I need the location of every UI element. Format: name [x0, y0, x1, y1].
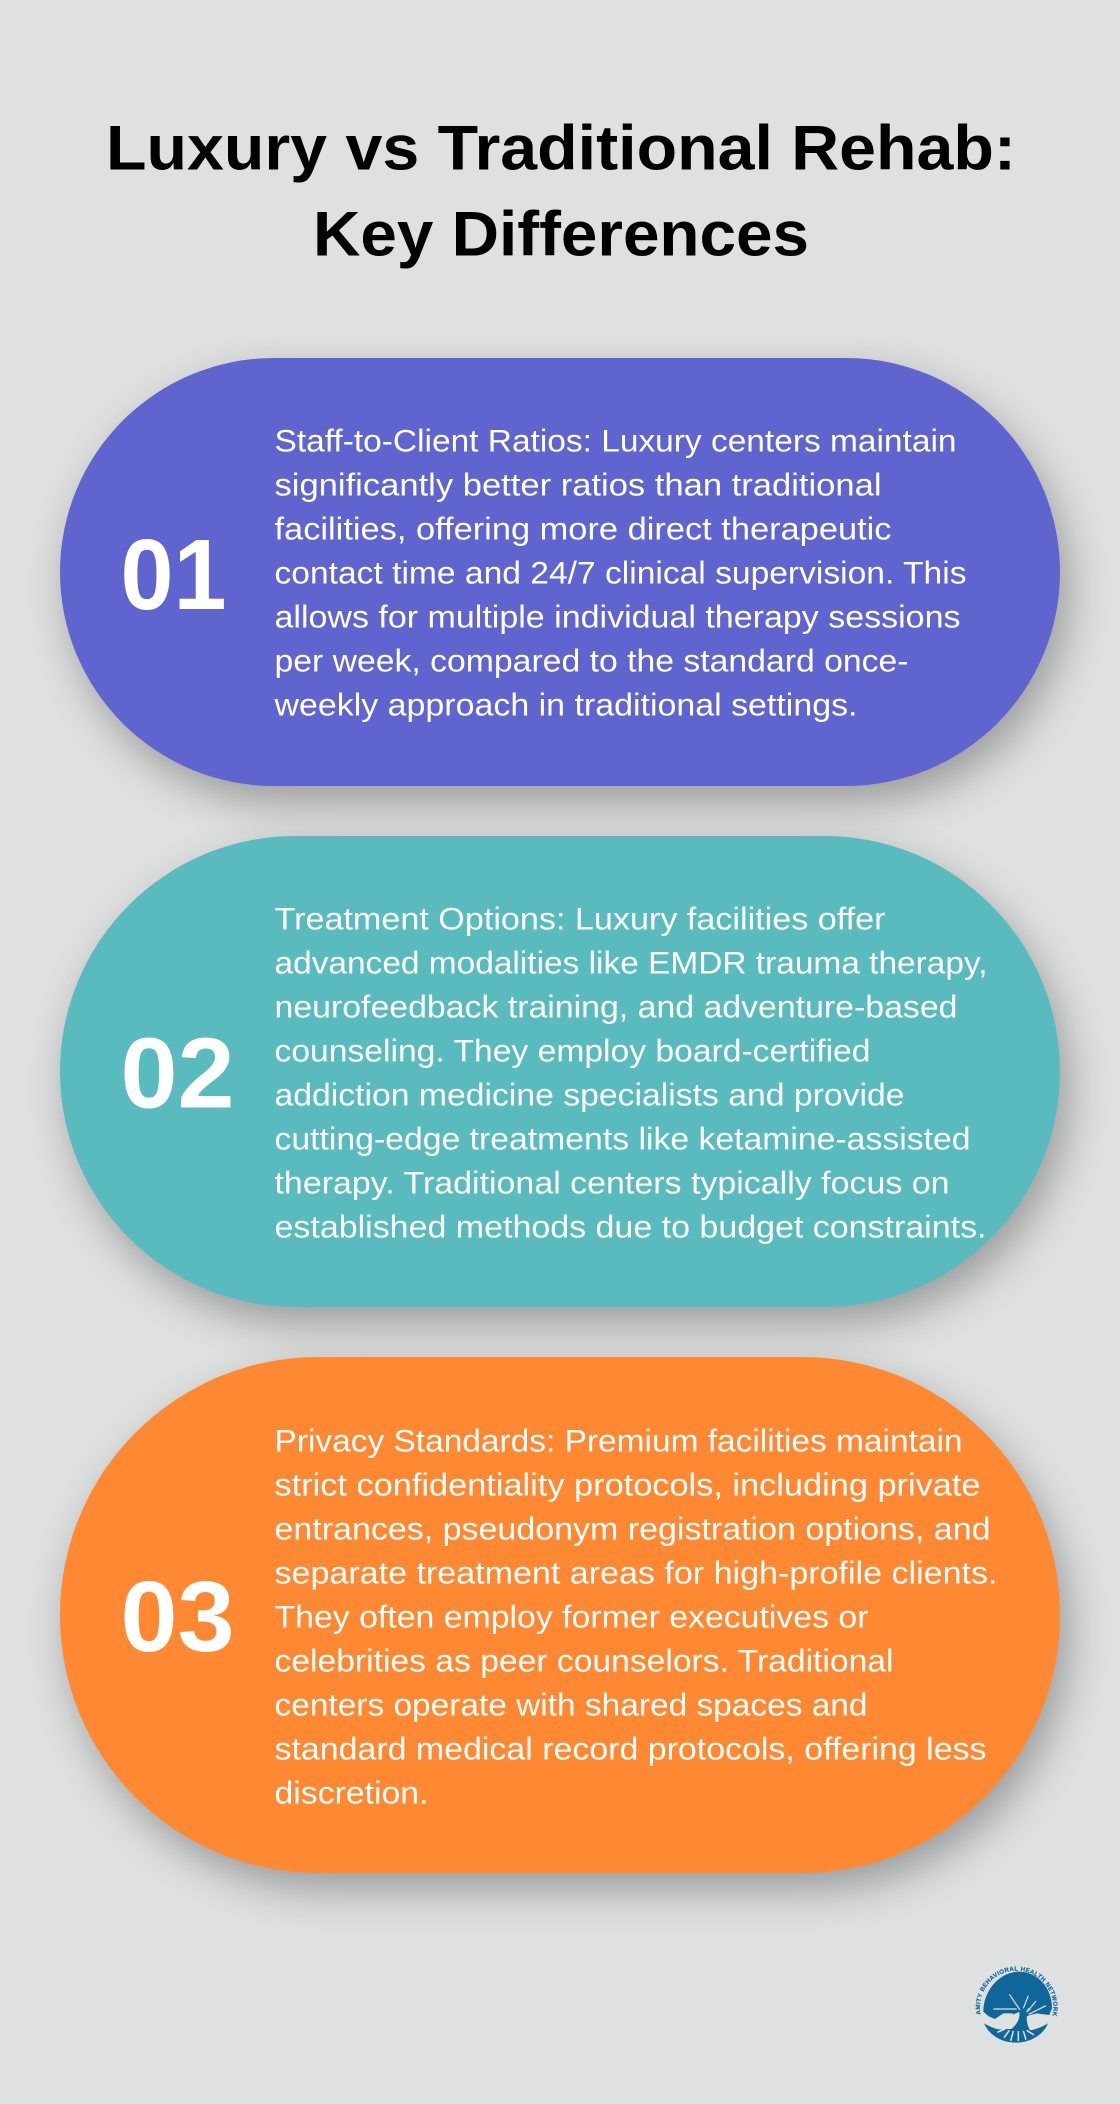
step number 03: 03 — [120, 1561, 234, 1673]
body text: privacy standards: celebrities as peer counselors. Traditional — [274, 1642, 894, 1678]
body text: treatment options: Treatment Options: Luxury facilities offer — [274, 900, 886, 936]
body text: staff-to-client ratios: Staff-to-Client Ratios: Luxury centers maintain — [274, 422, 956, 458]
title — [106, 114, 1016, 270]
icon: Amity Behavioral Health Network logo — [976, 1966, 1058, 2043]
title: Luxury vs Traditional Rehab: — [106, 114, 1016, 184]
body text: treatment options — [274, 900, 988, 1244]
body text: staff-to-client ratios: allows for multiple individual therapy sessions — [274, 598, 960, 634]
body text: treatment options: neurofeedback training, and adventure-based — [274, 988, 958, 1024]
body text: privacy standards: standard medical record protocols, offering less — [274, 1730, 986, 1766]
body text: staff-to-client ratios: significantly better ratios than traditional — [274, 466, 882, 502]
body text: treatment options: therapy. Traditional centers typically focus on — [274, 1164, 950, 1200]
body text: privacy standards — [274, 1422, 998, 1810]
body text: staff-to-client ratios: per week, compared to the standard once- — [274, 642, 908, 678]
body text: staff-to-client ratios: contact time and 24/7 clinical supervision. This — [274, 554, 966, 590]
body text: treatment options: counseling. They employ board-certified — [274, 1032, 870, 1068]
body text: treatment options: addiction medicine specialists and provide — [274, 1076, 904, 1112]
body text: privacy standards: Privacy Standards: Premium facilities maintain — [274, 1422, 962, 1458]
body text: staff-to-client ratios — [273, 422, 966, 722]
panel: treatment options — [60, 836, 1060, 1307]
step number 01: 01 — [120, 519, 226, 631]
panel: privacy standards — [60, 1357, 1060, 1873]
body text: privacy standards: They often employ former executives or — [274, 1598, 868, 1634]
body text: staff-to-client ratios: weekly approach in traditional settings. — [273, 686, 858, 722]
body text: staff-to-client ratios: facilities, offering more direct therapeutic — [274, 510, 892, 546]
body text: privacy standards: centers operate with shared spaces and — [274, 1686, 868, 1722]
body text: privacy standards: entrances, pseudonym registration options, and — [274, 1510, 990, 1546]
body text: treatment options: established methods due to budget constraints. — [274, 1208, 986, 1244]
body text: privacy standards: discretion. — [274, 1774, 428, 1810]
icon: Amity Behavioral Health Network logo: AMITY BEHAVIORAL HEALTH NETWORK — [976, 1966, 1058, 2016]
body text: treatment options: cutting-edge treatments like ketamine-assisted — [274, 1120, 970, 1156]
panel: staff-to-client ratios — [60, 358, 1060, 786]
body text: treatment options: advanced modalities like EMDR trauma therapy, — [274, 944, 988, 980]
body text: privacy standards: strict confidentiality protocols, including private — [274, 1466, 980, 1502]
step number 02: 02 — [120, 1018, 234, 1130]
title: Key Differences — [313, 200, 809, 270]
body text: privacy standards: separate treatment areas for high-profile clients. — [274, 1554, 998, 1590]
